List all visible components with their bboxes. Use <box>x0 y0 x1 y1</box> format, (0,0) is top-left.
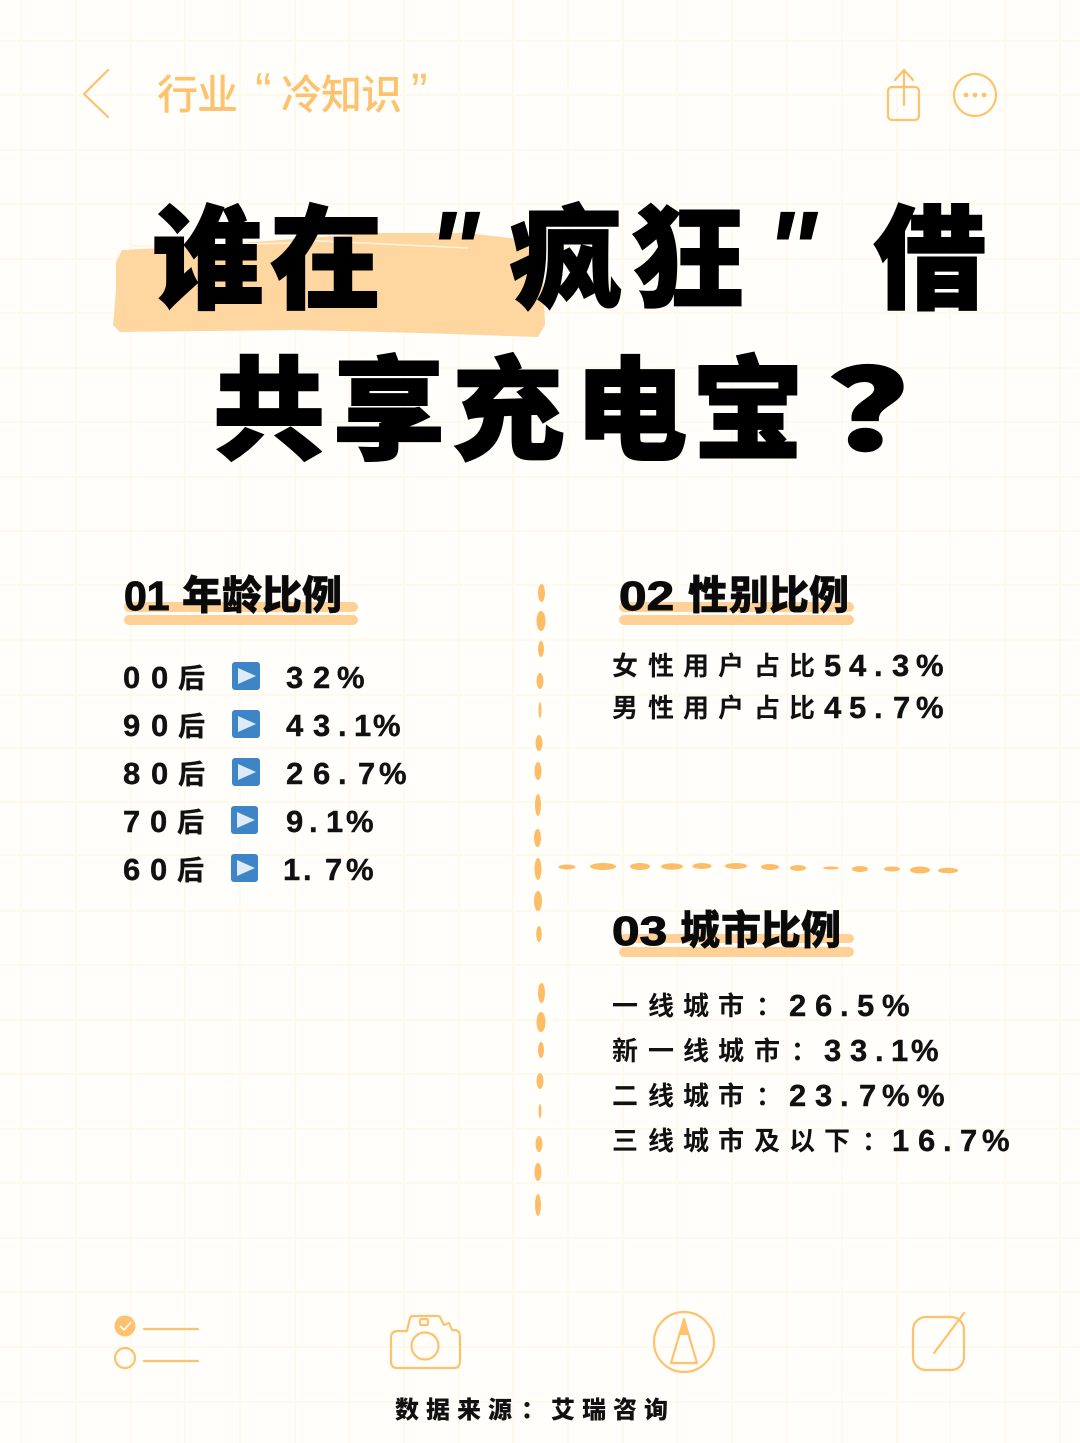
gender rows: 45.7% <box>824 690 944 725</box>
icon: edit <box>913 1313 964 1370</box>
panel: age ratio <box>123 563 407 888</box>
city rows: 23.7%% <box>789 1078 945 1113</box>
title highlight brush <box>113 233 545 337</box>
dashed divider: horizontal <box>558 863 958 874</box>
city rows <box>612 986 1010 1158</box>
gender rows: 男性用户占比 <box>612 688 815 725</box>
gender rows: 女性用户占比 <box>612 646 815 683</box>
heading: 02 <box>619 573 674 619</box>
heading underline <box>619 602 854 625</box>
age rows: 后 <box>177 849 204 888</box>
heading underline <box>619 934 854 957</box>
gender rows: 54.3% <box>824 648 944 683</box>
city rows: 二线城市： <box>612 1076 782 1113</box>
city rows: 一线城市： <box>612 986 782 1023</box>
city rows: 新一线城市： <box>612 1031 817 1068</box>
heading: 性别比例 <box>688 563 849 621</box>
nav title: ” <box>411 63 428 119</box>
age rows <box>123 657 407 888</box>
age rows: 80 <box>123 756 168 791</box>
age rows: 43.1% <box>286 708 401 743</box>
age rows: 26.7% <box>286 756 407 791</box>
nav title: 行业 <box>157 61 238 121</box>
heading: 01 <box>124 573 170 619</box>
city rows: 26.5% <box>789 988 910 1023</box>
age rows: 32% <box>286 660 365 695</box>
title <box>152 170 986 483</box>
title: " <box>765 189 819 312</box>
bottom toolbar <box>114 1312 964 1372</box>
source note: 数据来源：艾瑞咨询 <box>395 1390 668 1425</box>
title: 谁在 <box>152 170 382 332</box>
panel: gender ratio <box>612 563 944 725</box>
panel: city ratio <box>612 898 1010 1158</box>
dashed divider: vertical <box>534 584 546 1216</box>
age rows: 后 <box>178 705 205 744</box>
gender rows <box>612 646 944 725</box>
heading underline <box>124 602 358 625</box>
icon: camera <box>391 1316 460 1368</box>
age rows: 60 <box>123 852 167 887</box>
nav title: “ <box>255 63 272 119</box>
age rows: 00 <box>123 660 168 695</box>
heading: 城市比例 <box>680 898 841 956</box>
age rows: 90 <box>123 708 168 743</box>
city rows: 33.1% <box>824 1033 939 1068</box>
title: 共享充电宝 <box>213 321 804 483</box>
city rows: 16.7% <box>892 1123 1010 1158</box>
heading: 年龄比例 <box>182 563 342 621</box>
title: 疯狂 <box>510 170 744 332</box>
title: ？ <box>828 321 984 483</box>
heading: 03 <box>612 908 667 954</box>
icon: more <box>954 74 996 116</box>
age rows: 9.1% <box>286 804 374 839</box>
age rows: 后 <box>177 801 204 840</box>
age rows: 后 <box>178 753 205 792</box>
icon: share <box>888 70 919 120</box>
top navigation bar <box>84 61 996 121</box>
title: 借 <box>874 170 986 332</box>
icon: checklist <box>114 1316 198 1368</box>
icon: compass <box>654 1312 714 1372</box>
age rows: 70 <box>123 804 167 839</box>
city rows: 三线城市及以下： <box>612 1121 888 1158</box>
title: " <box>427 189 481 312</box>
nav title: 冷知识 <box>281 61 402 121</box>
age rows: 1.7% <box>283 852 374 887</box>
icon: back chevron <box>84 70 108 117</box>
age rows: 后 <box>178 657 205 696</box>
